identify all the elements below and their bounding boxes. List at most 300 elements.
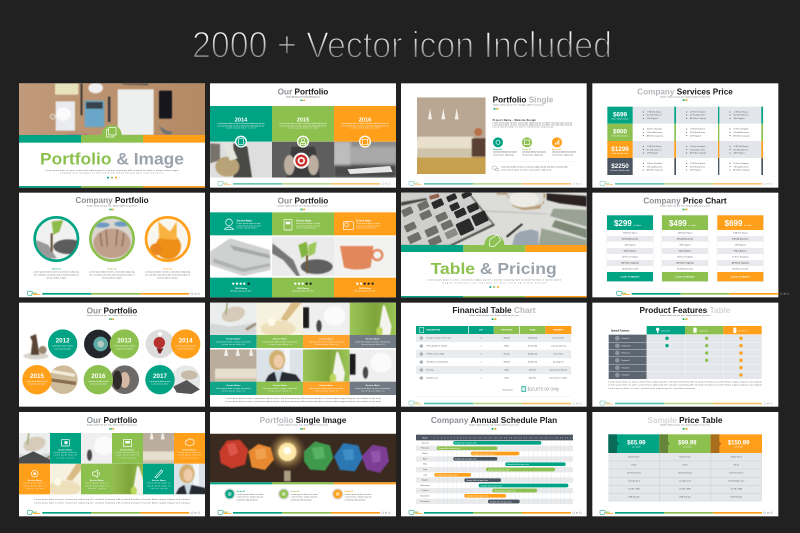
financial table: specializing industry	[549, 369, 567, 372]
price column basic: 10 Free Templates	[622, 256, 638, 259]
heading: Our Portfolio	[87, 305, 137, 315]
price table: All Video Capacity	[690, 152, 706, 155]
year 2014 block: Lorem ipsum dolor sit amet, consectetur adipiscing elit sed	[218, 124, 264, 127]
service labels row 1: Lorem ipsum dolor sit amet, consectetur	[262, 340, 298, 343]
price table: 1 GB Disk Space	[690, 163, 706, 165]
series 01	[224, 488, 264, 502]
gantt chart: Sample title text goes here	[466, 479, 488, 482]
price table: $150.99	[728, 441, 750, 447]
photo: orange cup	[334, 237, 396, 276]
dots	[107, 177, 117, 179]
service labels row 1: Lorem ipsum dolor sit	[361, 343, 385, 346]
gantt chart: March	[422, 452, 428, 455]
rating bands: 5000 Rating	[297, 287, 310, 290]
photo: helmet	[210, 142, 272, 178]
series 02: Series 02	[291, 490, 300, 493]
price table: 5 Email Accounts	[733, 131, 749, 134]
price table: Limit Account	[679, 480, 691, 483]
mosaic photos	[12, 433, 212, 496]
financial table: $120.00	[529, 378, 537, 380]
price column gold: 5 Email Accounts	[732, 237, 749, 240]
financial table: 1	[480, 362, 482, 364]
features: Lorem ipsum dolor sit amet, consectetur	[493, 151, 517, 154]
heading: Our Portfolio	[278, 86, 328, 96]
price column basic	[606, 215, 654, 282]
footer	[409, 181, 581, 186]
panel: Our Portfolio years slide: Sample subtitle text your here. Sample subtitle text your here	[286, 95, 320, 98]
series captions: Series 01	[52, 268, 62, 271]
colour band	[19, 135, 205, 143]
grand total	[502, 386, 560, 392]
series 03: Series 03	[345, 490, 354, 493]
gantt chart: August	[422, 479, 429, 482]
service bands: Service Name	[296, 221, 312, 223]
price column basic: 24H Support	[624, 243, 636, 246]
gantt chart: October	[421, 489, 429, 492]
financial table: PSD design for website	[427, 345, 448, 348]
service labels row 1: Lorem ipsum dolor sit	[268, 343, 292, 346]
financial table: $280	[504, 370, 510, 372]
gantt chart: December	[420, 500, 430, 503]
gantt chart: Sample title text goes here	[481, 484, 502, 487]
footer	[218, 510, 390, 515]
service labels row 2: Lorem ipsum dolor sit	[361, 390, 385, 393]
financial table: pending text	[553, 361, 564, 364]
financial table: QTY	[479, 330, 484, 332]
gantt chart: November	[420, 494, 430, 497]
price table: Unlimited Account	[728, 480, 745, 483]
financial table: $3,600.00	[528, 354, 538, 356]
service labels row 1: Lorem ipsum dolor sit	[315, 343, 338, 346]
financial table: 1	[480, 378, 482, 380]
price table: $1299	[611, 146, 629, 153]
year 2016 block: Lorem ipsum dolor sit amet	[350, 127, 380, 130]
panel: Product Features Table slide	[592, 303, 778, 407]
financial table: Concept done by	[551, 345, 566, 348]
price table: 5 Email Accounts	[690, 148, 705, 151]
price table: 24H Support	[647, 117, 658, 120]
price table: 10 Free Template	[733, 162, 750, 165]
mosaic service tiles: Service Name	[58, 449, 73, 451]
price table: Email	[734, 464, 739, 466]
service bands: Lorem ipsum dolor sit amet	[356, 224, 380, 227]
footer	[27, 291, 200, 296]
price table: No Video Access	[647, 114, 662, 117]
price column silver: 1GB Disk Space	[678, 232, 693, 234]
price table: 24H Support	[690, 169, 702, 172]
year bubbles: 2013	[117, 338, 132, 345]
year bubbles: Lorem ipsum dolor sit amet	[114, 345, 135, 348]
price table: 10 Free Template	[647, 128, 663, 131]
panel: Our Portfolio mosaic slide: Sample subtitle text your here. Sample subtitle text your here	[87, 424, 137, 427]
price column silver: /m / Silver	[688, 225, 697, 227]
gantt chart	[416, 435, 573, 504]
financial table: 1	[480, 370, 482, 372]
year 2016 block: 2016	[359, 117, 371, 123]
series captions: Series 02	[108, 268, 117, 271]
price column silver: $499	[669, 219, 687, 228]
quote note: Lorem ipsum dolor sit amet, consectetur adipiscing	[501, 168, 551, 171]
financial table: $3,000	[504, 362, 511, 364]
bottom band	[19, 186, 205, 188]
photo: paper balls and bulb	[210, 434, 396, 482]
panel: Portfolio Single slide: Sample subtitle text your here. Sample subtitle text your here	[493, 104, 544, 107]
price column gold: 10 Free Templates	[732, 256, 749, 259]
series 01: consectetuer adipiscing elit	[237, 496, 264, 499]
year bubbles: Lorem ipsum dolor	[29, 384, 46, 386]
financial table: REMARKS	[553, 329, 564, 332]
photo: desk flat lay	[19, 83, 205, 135]
icons: circle badges	[235, 136, 371, 148]
series captions: elit, sed diam nonummy nibh euismod tincidunt ut	[89, 273, 135, 276]
price table: All Video Capacity	[733, 169, 749, 172]
price table: 5 Email Accounts	[647, 165, 662, 168]
panel: Financial Table Chart slide	[401, 303, 587, 407]
price table	[608, 434, 762, 502]
mosaic service tiles: Lorem ipsum	[88, 488, 106, 490]
service labels row 2: Service Name	[366, 385, 381, 387]
title: 2000 + Vector icon Included	[192, 24, 612, 66]
gantt chart: September	[420, 484, 430, 487]
mosaic service tiles: Lorem ipsum dolor sit	[116, 454, 139, 457]
service labels row 2: Lorem ipsum dolor sit	[268, 390, 292, 393]
price column silver	[661, 215, 709, 282]
financial table: $3,000	[504, 338, 511, 340]
price column basic: 1GB Disk Space	[623, 232, 638, 234]
service labels row 1	[210, 335, 396, 348]
panel: Company Price Chart slide	[592, 193, 789, 297]
rating bands: Average rating score here	[354, 289, 376, 292]
footer	[409, 401, 581, 405]
service bands: Lorem ipsum dolor	[356, 228, 376, 230]
price column basic: Video Access	[624, 250, 637, 253]
body text: Lorem ipsum dolor sit amet, consectetuer adipiscing elit, sed diam nonummy nibh euismod tincidunt ut laoreet dolore magna aliquam erat volutpat	[608, 384, 762, 387]
mosaic service tiles: Lorem ipsum dolor sit	[23, 482, 47, 485]
body text: Lorem ipsum dolor sit amet, consectetur adipiscing elit, sed diam nonummy nibh euismod tincidunt ut laoreet dolore magna aliquam erat volutpat ut wisi enim	[225, 400, 381, 403]
service labels row 2: Service Name	[273, 385, 288, 387]
heading: Our Portfolio	[87, 415, 137, 425]
panel: Financial Table Chart slide: Sample subtitle text your here. Sample subtitle text your here	[469, 314, 519, 317]
price column silver: 10 Free Templates	[677, 256, 693, 259]
mosaic service tiles: Service Name	[182, 449, 197, 451]
body text	[34, 498, 190, 504]
mosaic service tiles: Lorem ipsum dolor sit	[85, 484, 109, 487]
price table: $65.99	[627, 441, 646, 447]
grand total: $10,870.00 Only	[528, 387, 560, 392]
heading: Financial Table Chart	[452, 305, 536, 315]
year 2014 block: Lorem ipsum dolor sit amet	[226, 127, 256, 130]
photo: newspapers	[210, 238, 271, 276]
price table: 5 Email Accounts	[690, 114, 705, 117]
price table: 10 Free Template	[733, 128, 750, 131]
year bubbles: Lorem ipsum dolor	[177, 348, 194, 350]
mosaic service tiles: Lorem ipsum dolor sit	[54, 451, 77, 454]
year bubbles: Lorem ipsum dolor	[54, 348, 71, 350]
body text	[608, 381, 762, 390]
service labels row 1: Lorem ipsum dolor sit amet, consectetur	[355, 340, 391, 343]
price column basic: CLICK TO SELECT	[620, 277, 640, 279]
features: Feature 02	[522, 148, 531, 151]
gantt chart: Sample title text goes here	[488, 468, 510, 471]
features table: Version 03	[738, 330, 747, 332]
year 2015 block: Lorem ipsum dolor sit amet, consectetur adipiscing elit sed	[280, 124, 326, 127]
price table: No Video Access	[733, 114, 748, 117]
price table: All Video Capacity	[690, 117, 706, 120]
financial table: 1	[480, 346, 482, 348]
price table: 100 Free Phone	[627, 471, 642, 474]
panel: Company Annual Schedule Plan slide: Sample subtitle text your here. Sample subtitle text your here	[469, 424, 519, 427]
year 2015 block: 2015	[297, 117, 309, 123]
price table: 24H Support	[733, 117, 745, 120]
price table: Basic Membership	[612, 118, 628, 120]
features table: Feature 3	[622, 352, 629, 355]
rating bands: 5000 Rating	[235, 287, 248, 290]
series captions: Lorem ipsum dolor sit amet, consectetuer adipiscing	[89, 270, 134, 273]
heading: Portfolio Single Image	[260, 415, 347, 425]
panel: Company Annual Schedule Plan slide	[401, 412, 587, 516]
icon: gallery badge	[102, 125, 122, 137]
mosaic service tiles: Service Name	[28, 480, 43, 482]
service labels row 2	[210, 382, 396, 395]
body text: Lorem ipsum dolor sit amet, consectetur adipiscing elit, sed diam nonummy nibh euismod tincidunt ut laoreet dolore magna aliquam erat volutpat	[34, 501, 190, 504]
body text: magna aliquam erat volutpat ut wisi enim ad minim veniam	[442, 281, 547, 284]
gantt chart: Sample title text goes here	[473, 452, 495, 455]
financial table: Design concept / Font icons	[427, 337, 451, 340]
panel: Sample Price Table slide	[592, 412, 778, 516]
price table: 5 Email Accounts	[647, 131, 662, 134]
service bands: Lorem ipsum dolor sit amet	[237, 224, 261, 227]
price table: $2250	[611, 163, 629, 170]
photo circles	[23, 330, 200, 394]
series captions	[34, 268, 191, 280]
quote note	[492, 165, 568, 171]
price table: 24H Support	[647, 152, 658, 155]
features table: Version 01	[661, 330, 670, 332]
price table: Email	[683, 464, 688, 466]
mosaic service tiles: Lorem ipsum dolor sit	[178, 451, 201, 454]
financial table: lorem ipsum sample	[549, 377, 568, 380]
price table: 10 Free Template	[647, 162, 663, 165]
year bubbles	[22, 329, 200, 394]
gantt chart: 1 2 3 4 5 6 7 8 9 10 11 12 13 14 15 16 17 18 19 20 21 22 23 24 25 26 27 28 29 30 31	[434, 437, 573, 439]
service bands	[210, 212, 396, 235]
footer	[600, 510, 772, 515]
panel: Company Services Price slide	[592, 83, 778, 188]
price table: Limit Account	[628, 480, 640, 483]
heading: Sample Price Table	[647, 415, 723, 425]
mosaic service tiles: Service Name	[90, 480, 105, 482]
gantt chart: Sample title text goes here	[436, 474, 458, 477]
features	[493, 137, 576, 156]
financial table: $900	[504, 346, 510, 348]
price table: 5GB Storage	[679, 496, 692, 499]
year 2015 block	[272, 106, 334, 142]
year bubbles: Lorem ipsum dolor sit amet	[88, 380, 109, 383]
series 03	[332, 488, 372, 502]
financial table	[416, 326, 571, 380]
price table: 100 Free Phone	[729, 471, 744, 474]
footer	[27, 510, 200, 515]
price table: Single Name	[679, 456, 692, 458]
photo: grey interior	[334, 142, 396, 178]
price table: $99.99	[678, 441, 697, 447]
price table: No Video Access	[690, 165, 705, 168]
series captions: elit, sed diam nonummy nibh euismod tincidunt ut	[145, 273, 191, 276]
service labels row 2: Lorem ipsum dolor sit amet, consectetur	[262, 387, 298, 390]
gantt chart: Sample title text goes here	[455, 442, 477, 445]
series 01: nonummy nibh euismod	[237, 500, 257, 502]
year bubbles: Lorem ipsum dolor sit amet	[52, 345, 73, 348]
service bands: Lorem ipsum dolor sit amet	[296, 224, 320, 227]
colour band	[210, 482, 396, 484]
body text: Lorem ipsum dolor sit amet, consectetur adipiscing elit, sed diam nonummy nibh euismod tincidunt ut laoreet dolore magna aliquam erat volutpat	[34, 498, 190, 501]
service labels row 2: Lorem ipsum dolor sit amet, consectetur	[355, 387, 391, 390]
features: consectetuer adipiscing	[522, 153, 543, 156]
price column silver: 5 Email Accounts	[677, 237, 694, 240]
price table: 5GB Storage	[628, 496, 641, 499]
panel: Company Portfolio slide: Sample subtitle text your here. Sample subtitle text your here	[87, 204, 137, 207]
footer	[600, 401, 772, 405]
year bubbles: Lorem ipsum dolor	[90, 384, 107, 386]
price table: $699	[613, 111, 628, 118]
gantt chart: June	[423, 469, 428, 471]
photos row 2	[210, 349, 396, 383]
service labels row 1: Service Name	[366, 338, 381, 340]
financial table: $3,000.00	[528, 362, 538, 364]
price table: 1 GB Disk Space	[690, 129, 706, 131]
gantt chart: July	[423, 474, 427, 476]
year bubbles: 2016	[91, 373, 106, 380]
price table: $900	[613, 129, 628, 136]
year 2016 block: Lorem ipsum dolor sit amet, consectetur adipiscing elit sed	[342, 124, 388, 127]
financial table: Hosting	[427, 369, 433, 372]
service labels row 1: Lorem ipsum dolor sit amet, consectetur	[216, 340, 251, 343]
service labels row 1: Service Name	[273, 338, 288, 340]
series 01: Series 01	[237, 490, 246, 493]
year bubbles: Lorem ipsum dolor sit amet	[175, 345, 196, 348]
mosaic service tiles: Lorem ipsum dolor sit	[147, 482, 171, 485]
financial table: 1	[480, 354, 482, 356]
price table: No Video Access	[733, 148, 748, 151]
mosaic service tiles: Service Name	[120, 449, 135, 451]
service bands: Lorem ipsum dolor sit amet	[356, 222, 380, 225]
service bands: Lorem ipsum dolor	[237, 228, 257, 230]
year 2016 block	[334, 106, 396, 142]
panel: Company Price Chart slide: Sample subtitle text your here. Sample subtitle text your here	[660, 205, 710, 208]
body text	[45, 169, 180, 175]
price table: 24H Support	[733, 152, 745, 155]
price column gold: CLICK TO SELECT	[731, 277, 751, 279]
series 02: Lorem ipsum dolor sit amet	[291, 493, 318, 496]
features table	[609, 326, 762, 379]
year bubbles: Lorem ipsum dolor sit amet	[27, 380, 48, 383]
year 2015 block: Lorem ipsum dolor sit amet, consectetur adipiscing elit sed	[280, 122, 326, 125]
price table: 1 GB Disk Space	[733, 146, 749, 148]
features table: Version 02	[699, 330, 708, 332]
features table: Feature 1	[622, 337, 629, 340]
financial table: Lorem ipsum	[553, 337, 564, 340]
price table: per month	[683, 446, 691, 449]
price table: No Video Access	[690, 131, 705, 134]
panel: Our Portfolio mosaic slide	[12, 412, 212, 516]
rating bands: 5000 Rating	[359, 287, 372, 290]
features table: Feature 02	[622, 344, 631, 347]
panel: Portfolio Single slide	[401, 83, 587, 188]
heading: Company Portfolio	[75, 195, 149, 205]
year 2015 block: Lorem ipsum dolor sit amet	[288, 127, 318, 130]
financial table: UNIT PRICE	[501, 330, 513, 332]
service bands: Lorem ipsum dolor sit amet	[296, 222, 320, 225]
service bands: Lorem ipsum dolor	[296, 228, 316, 230]
price table: All Video Capacity	[647, 169, 663, 172]
year bubbles: 2015	[30, 373, 45, 380]
panel: Our Portfolio timeline slide	[19, 303, 205, 407]
bottom band	[401, 296, 587, 297]
price column silver: No Need to Install	[677, 268, 693, 271]
panel: Our Portfolio services slide: Sample subtitle text your here. Sample subtitle text your here	[278, 205, 328, 208]
year 2014 block	[210, 106, 272, 142]
price table: per month	[735, 446, 743, 449]
heading: Company Services Price	[637, 86, 733, 96]
icon: price tag badge	[484, 235, 504, 247]
series captions: laoreet dolore magna	[158, 277, 179, 280]
financial table: Maintenance	[427, 377, 439, 380]
panel: Sample Price Table slide: Sample subtitle text your here. Sample subtitle text your here	[660, 424, 710, 427]
service labels row 1: Lorem ipsum dolor sit amet, consectetur	[309, 340, 344, 343]
panel: Product Features Table slide: Sample subtitle text your here. Sample subtitle text your here	[660, 314, 710, 317]
mosaic service tiles: Lorem ipsum	[119, 457, 136, 459]
year bubbles: Lorem ipsum dolor	[116, 348, 133, 350]
price column gold: 24H Support	[735, 243, 746, 246]
price table: 1 GB Disk Space	[733, 112, 749, 114]
features table: Feature 4	[622, 359, 629, 362]
price column basic: $299	[614, 219, 632, 228]
body text: Lorem ipsum dolor sit amet, consectetuer adipiscing elit, sed diam nonummy	[608, 387, 695, 390]
service labels row 2: Lorem ipsum dolor sit	[222, 390, 245, 393]
financial table: $1,200	[504, 354, 511, 356]
price column silver: CLICK TO SELECT	[675, 277, 695, 279]
mosaic service tiles: Lorem ipsum dolor sit	[178, 454, 201, 457]
circle photo: hands	[90, 217, 134, 261]
series 01: Lorem ipsum dolor sit amet	[237, 493, 264, 496]
service bands: Lorem ipsum dolor sit amet	[237, 222, 261, 225]
series 02: nonummy nibh euismod	[291, 500, 311, 502]
price table: 10 Free Template	[690, 145, 706, 148]
footer	[218, 181, 390, 186]
year bubbles: Lorem ipsum dolor sit amet	[150, 380, 171, 383]
price column gold: /m / Gold	[744, 225, 751, 227]
series 03: Lorem ipsum dolor sit amet	[345, 493, 372, 496]
project text: Lorem ipsum dolor sit amet, consectetur adipiscing	[493, 126, 553, 129]
footer	[600, 181, 772, 186]
mosaic service tiles: Lorem ipsum dolor sit	[23, 484, 47, 487]
price table: 50 GB / 1MB	[628, 489, 640, 491]
financial table: $3,000.00	[528, 338, 538, 340]
series captions: laoreet dolore magna	[46, 277, 67, 280]
price column gold: All Video Capacity	[732, 262, 750, 265]
features table: Feature 6	[622, 374, 629, 377]
price table: 1 GB Disk Space	[647, 146, 663, 148]
slide heading: Portfolio & Image	[40, 150, 184, 168]
circle photo: orange splash	[146, 217, 189, 261]
photo: living room	[417, 97, 486, 174]
gantt chart: February	[421, 447, 429, 450]
service labels row 2: Lorem ipsum dolor sit amet, consectetur	[216, 387, 251, 390]
panel: Company Portfolio slide	[19, 193, 205, 297]
mosaic service tiles: Lorem ipsum dolor sit	[147, 484, 171, 487]
colour band	[401, 245, 587, 252]
price table: 50 GB / 1MB	[731, 489, 743, 491]
